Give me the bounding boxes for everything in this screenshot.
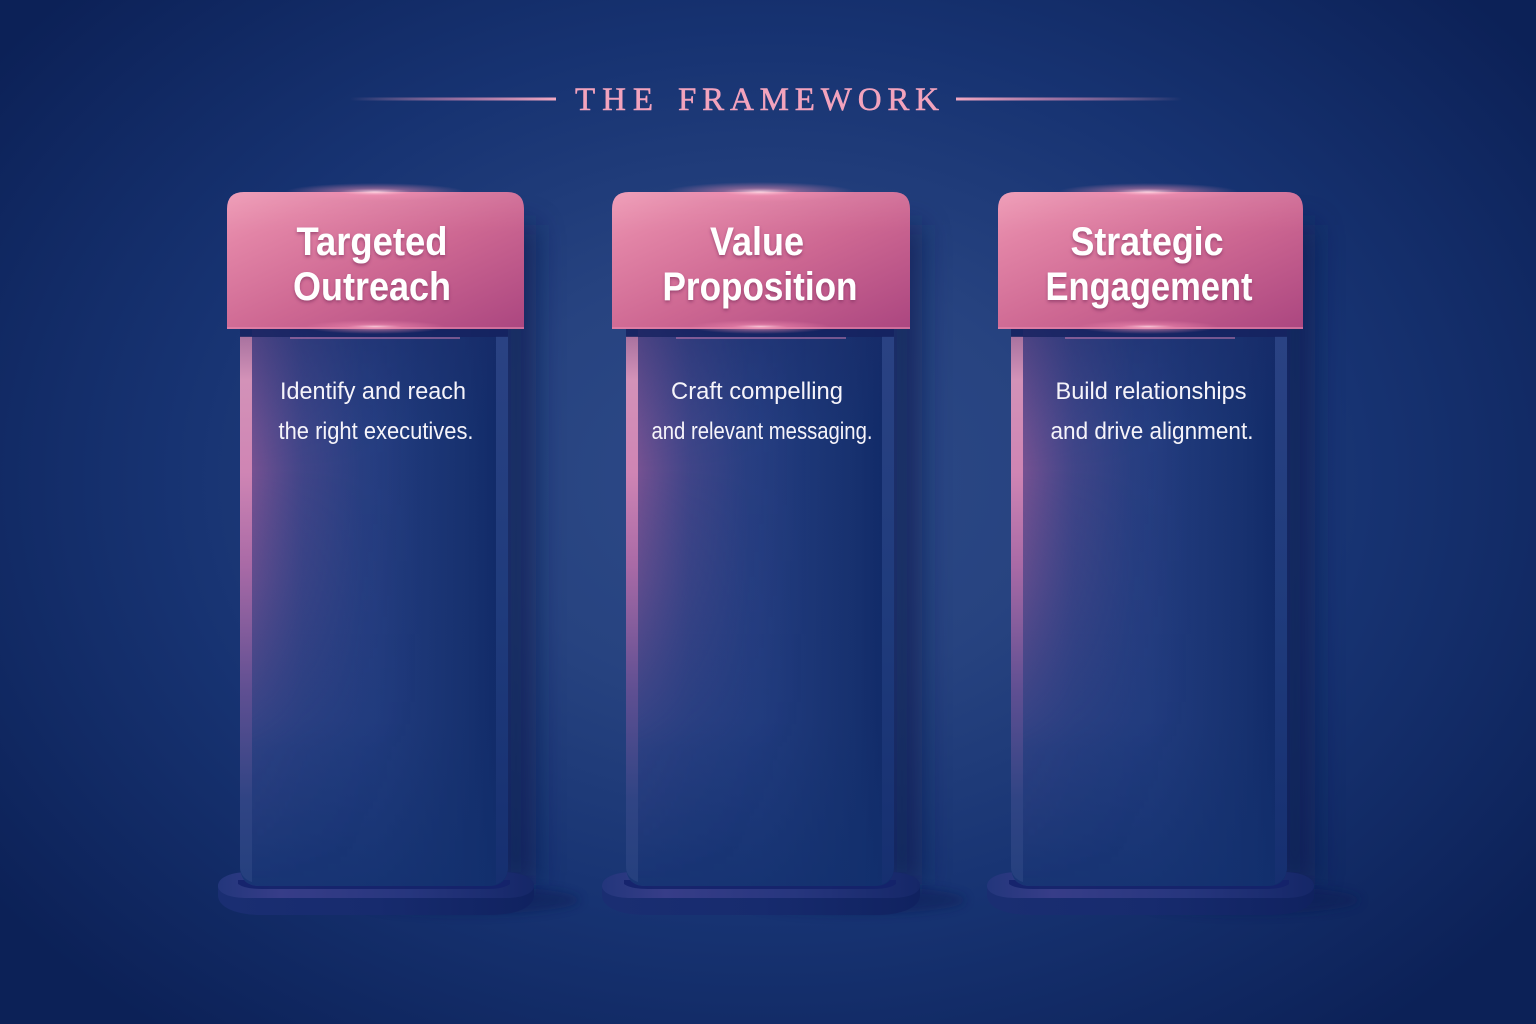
pillar shadow [496,225,536,885]
title rule left [350,98,556,100]
pedestal base [602,872,920,915]
pedestal base [218,872,534,915]
body text [652,378,872,445]
heading [1046,220,1252,309]
title word: THE: THE [575,82,653,118]
body text: Craft compelling [671,378,843,405]
body text [278,378,474,445]
title: The Framework [350,82,1182,118]
body text [1050,378,1254,445]
heading: Engagement [1046,265,1252,309]
header cap [612,182,910,334]
pillar body [240,328,508,886]
body text: Identify and reach [280,378,466,405]
heading [662,220,858,309]
panel: Value Proposition pillar [602,182,966,915]
title rule right [956,98,1182,100]
pedestal base [987,872,1314,915]
pillar shadow [1275,225,1315,885]
pedestal shadow [746,886,966,914]
heading: Value [710,220,804,264]
pillar shadow [882,225,922,885]
panel: Strategic Engagement pillar [987,183,1360,915]
heading: Proposition [662,265,858,309]
body text: and relevant messaging. [652,418,872,445]
body text: the right executives. [278,418,474,445]
heading: Targeted [296,220,448,264]
pedestal shadow [1140,886,1360,914]
heading [293,220,451,309]
body text: and drive alignment. [1050,418,1254,445]
pedestal shadow [360,886,580,914]
pillar body [1011,328,1287,886]
header cap [998,183,1303,334]
heading: Outreach [293,265,451,309]
title word: FRAMEWORK: FRAMEWORK [678,82,939,118]
heading: Strategic [1070,220,1224,264]
header cap [227,183,524,334]
body text: Build relationships [1056,378,1246,405]
panel: Targeted Outreach pillar [218,183,580,915]
pillar body [626,328,894,886]
